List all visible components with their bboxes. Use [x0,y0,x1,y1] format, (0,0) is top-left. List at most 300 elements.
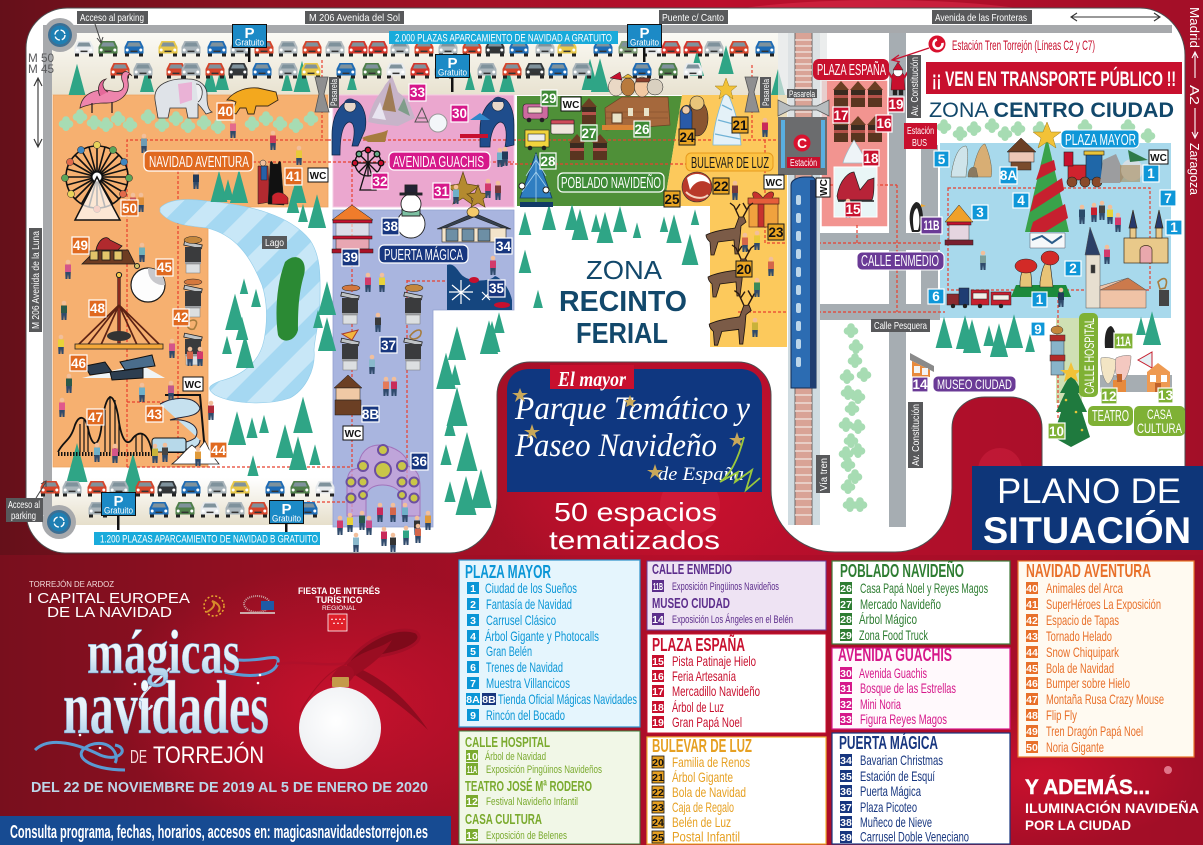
zone: Bulevar de Luz [664,95,787,347]
icon: Flip Fly ride [75,272,163,349]
icon: dragon train [82,238,135,264]
heading: Zona Centro Ciudad: ZONA CENTRO CIUDAD [929,99,1174,122]
red dashed walking routes [127,60,1150,520]
list: Plaza Mayor items: 4 [470,631,476,643]
list: Poblado Navideno items: 29 [840,630,852,642]
WC signs [183,97,1168,440]
icon and text: train station pointer [892,36,1095,62]
arrow: north south [34,78,42,147]
lake [160,199,320,403]
list: Teatro items: 12 [466,796,478,808]
icon: Belen de Luz [680,96,708,136]
list: Puerta Magica items: 38 [840,817,852,829]
icon: superheroes [258,160,288,205]
list: Navidad Aventura items: 42 [1026,615,1038,627]
banner: 2000 parking spaces: 2.000 PLAZAS APARCAMIENTO DE NAVIDAD A GRATUITO [395,32,612,44]
icon: snowman [397,185,425,238]
list: Plaza Mayor items: Muestra Villancicos [486,675,570,691]
zone markers: Avenida Guachis [372,84,468,199]
zone markers: Poblado Navideno: 27 [581,126,597,141]
list: Puerta Magica items: Muñeco de Nieve [860,814,932,830]
zone markers: lime Hospital Teatro Casa: 11A [1116,334,1131,349]
zone: Puerta Magica [333,210,514,527]
parking sign south 1 [102,492,136,530]
list: Plaza Mayor items: Gran Belén [486,643,532,659]
arrow to north parking [95,24,103,43]
banner: 2000 parking spaces [389,31,618,44]
text: 50 themed spaces [549,497,720,555]
list: Navidad Aventura items: Tren Dragón Papá Noel [1046,723,1143,739]
market stalls Poblado [569,98,608,160]
heading: Zona Recinto Ferial [559,255,687,350]
Plaza Espana market stalls [833,81,883,142]
icon: Rincon del Bocado booths [1050,326,1065,375]
zone markers: Navidad Aventura [70,103,302,458]
icon: flamingos [80,72,132,113]
roundabout south [42,505,76,539]
list: Museo Ciudad items: Exposición Los Ángeles en el Belén [672,613,793,626]
food booths Navidad Aventura [184,236,202,365]
sign: Teatro: TEATRO [1092,408,1129,425]
panel: largest theme park claim [507,365,762,492]
icon: penguin 11A [1105,326,1116,348]
icon: church and houses [1085,227,1146,308]
icon: Reyes Magos figure [368,76,415,126]
list: Poblado Navideno items: Zona Food Truck [859,627,929,643]
road labels M50 M45: M 45 [28,62,54,76]
list: Bulevar de Luz items: Bola de Navidad [672,784,746,800]
text: Y ademas city lighting: ILUMINACIÓN NAVIDEÑA [1025,799,1199,816]
list: Navidad Aventura items: 48 [1026,710,1038,722]
parked cars north rows [74,41,774,78]
sign: Navidad Aventura [144,151,253,171]
zone markers: Plaza Mayor: 3 [976,205,984,220]
WC signs: WC [819,179,830,196]
icon: classic carousel [945,205,973,245]
zone markers: Bulevar de Luz: 24 [679,130,695,145]
list: Plaza Mayor items: 7 [470,678,476,690]
parking sign north 1: P [244,25,255,42]
icon: capital emblem [204,596,224,616]
zone markers: Poblado Navideno: 26 [634,122,650,137]
sign: Avenida Guachis [389,152,490,171]
road sign: Acceso al parking: Acceso al parking [80,12,144,24]
icon: gift box [748,192,779,227]
list: Plaza Espana items: 16 [652,671,664,683]
panel: largest theme park claim: de España [658,464,744,485]
panel: legend Puerta Magica [832,732,1010,844]
sign: Museo Ciudad: MUSEO CIUDAD [937,376,1012,392]
list: Navidad Aventura items: 40 [1026,583,1038,595]
sign: Casa Cultura: CASA [1147,406,1172,422]
list: Navidad Aventura items [1026,580,1164,755]
list: Navidad Aventura items: 43 [1026,631,1038,643]
zone: Avenida Guachis [333,95,514,207]
list: Calle Hospital items: 11A [467,764,477,776]
icon: locomotive [1064,151,1104,187]
roundabout north [43,18,77,52]
list: Poblado Navideno items: Casa Papá Noel y Reyes Magos [860,580,988,596]
list: Plaza Mayor items: Trenes de Navidad [486,659,563,675]
panel: legend Avenida Guachis [832,645,1010,729]
list: Avenida Guachis items [840,665,956,727]
heading: Plaza Espana: PLAZA ESPAÑA [652,634,745,655]
sign: Plaza Espana: PLAZA ESPAÑA [817,59,886,79]
zone markers: Puerta Magica: 34 [496,239,511,254]
parking sign north 2: P [447,55,458,72]
sign: Calle Enmedio: CALLE ENMEDIO [861,253,939,270]
heading: Calle Enmedio: CALLE ENMEDIO [652,561,732,578]
food booths Plaza Picoteo [341,284,423,370]
icon: magic blue tree [519,153,553,207]
icon: white Christmas bauble with red bow [277,630,428,769]
parking sign south 2: P [281,501,292,518]
parking area south [52,478,333,525]
icon: penguin 11B [910,202,926,232]
list: Casa Cultura items: Exposición de Belenes [486,830,567,842]
zone markers: Navidad Aventura: 49 [73,238,88,253]
list: Puerta Magica items: Bavarian Christmas [860,752,943,768]
list: Plaza Espana items [652,653,760,730]
list: Puerta Magica items: 36 [840,786,852,798]
sign: Museo Ciudad [933,376,1016,392]
list: Plaza Espana items: Gran Papá Noel [672,714,742,730]
panel: largest theme park claim: Paseo Navideño [514,428,717,464]
list: Bulevar de Luz items: 25 [652,832,664,844]
heading: Poblado Navideno: POBLADO NAVIDEÑO [840,560,964,581]
roads [43,25,1172,527]
list: Bulevar de Luz items: 22 [652,787,664,799]
zone markers: Avenida Guachis: 31 [434,184,449,199]
text: Y ademas city lighting: Y ADEMÁS... [1025,776,1150,799]
compass: Madrid A2 Zaragoza: A2 [1187,85,1202,105]
parking sign south 1: Gratuito [104,506,133,516]
title block: Plano de Situacion [972,466,1203,551]
road sign: Pasarela left: Pasarela [329,79,339,106]
list: Plaza Espana items: Árbol de Luz [672,699,724,715]
zone markers: Bulevar de Luz [664,117,784,277]
food trucks [523,104,574,150]
railway track [778,33,827,525]
heading: Calle Hospital: CALLE HOSPITAL [465,734,550,751]
zone markers: lime Hospital Teatro Casa: 10 [1049,424,1064,439]
road sign: Av. Constitucion south [908,402,923,468]
zone markers: Plaza Mayor: 7 [1164,191,1172,206]
heading: Avenida Guachis: AVENIDA GUACHIS [838,645,952,665]
heading: Zona Recinto Ferial: FERIAL [576,318,668,350]
zone markers: Plaza Espana: 15 [845,202,861,217]
list: Bulevar de Luz items: 21 [652,772,664,784]
icon: castle [1124,210,1168,263]
road sign: Av. Constitucion south: Av. Constitución [910,404,922,466]
zone markers: Plaza Espana: 18 [863,151,879,166]
list: Puerta Magica items: 37 [840,802,852,814]
icon: train [791,177,816,388]
icon and text: train station pointer: Estación Tren Torrejón (Líneas C2 y C7) [952,37,1095,53]
icon: Museo Ciudad house [910,353,934,377]
zone markers: Bulevar de Luz: 21 [732,118,748,133]
panel: largest theme park claim: Parque Temático y [514,391,750,427]
list: Plaza Mayor items: Árbol Gigante y Photocalls [485,628,599,644]
heading: Teatro: TEATRO JOSÉ Mª RODERO [465,778,592,795]
zone markers: Plaza Mayor: 1 [1147,166,1155,181]
list: Plaza Mayor items: Fantasía de Navidad [486,596,572,612]
text: 50 themed spaces: tematizados [549,525,720,555]
heading: Plaza Mayor: PLAZA MAYOR [465,562,551,582]
road sign: Calle Pesquera: Calle Pesquera [874,320,927,332]
panel: legend Poblado Navideno [832,560,1010,644]
icon: Gran Belen [951,144,992,177]
parking sign north 2: Gratuito [438,68,467,78]
zone markers: Puerta Magica: 38 [383,219,398,234]
zone markers: Plaza Mayor: 4 [1017,193,1025,208]
footer: website banner: Consulta programa, fechas, horarios, accesos en: magicasnavidadestorrejon.es [10,822,428,842]
zone markers: Plaza Mayor: 9 [1034,322,1042,337]
list: Plaza Mayor items: 5 [470,646,476,658]
footer: website banner [0,816,451,845]
zone markers: Plaza Espana: 17 [833,108,849,123]
zone markers: Bulevar de Luz: 20 [736,262,752,277]
list: Bulevar de Luz items: Belén de Luz [672,814,731,830]
list: Puerta Magica items: 35 [840,771,852,783]
map base: white rounded plan outline [26,8,1185,553]
WC signs: WC [563,100,579,111]
sign: Puerta Magica [379,245,468,264]
list: Navidad Aventura items: 47 [1026,694,1038,706]
panel: legend Navidad Aventura [1018,561,1194,757]
list: Puerta Magica items: Carrusel Doble Veneciano [860,828,969,844]
logo: Magicas Navidades de Torrejon [35,619,278,770]
list: Plaza Mayor items: Tienda Oficial Mágicas Navidades [498,691,637,707]
list: Plaza Mayor items: 3 [470,615,476,627]
zone markers: Avenida Guachis: 33 [410,85,425,100]
zone markers: Plaza Mayor [928,151,1182,337]
zone: Plaza Mayor [940,143,1171,318]
heading: Bulevar de Luz: BULEVAR DE LUZ [652,736,752,756]
zone: Calle Hospital strip [1056,318,1172,403]
zone: Navidad Aventura [53,95,328,467]
list: Museo Ciudad items: 14 [652,614,664,626]
sign: Casa Cultura [1134,406,1185,436]
sign: Poblado Navideno [558,172,664,192]
train station [778,117,827,175]
list: Avenida Guachis items: 33 [840,714,852,726]
logo: Magicas Navidades de Torrejon: mágicas [87,619,240,687]
list: Bulevar de Luz items: Caja de Regalo [672,799,734,815]
sign: Calle Hospital: CALLE HOSPITAL [1081,318,1097,394]
WC signs: WC [185,380,201,391]
panel: largest theme park claim: El mayor [557,367,627,391]
icon: log cabin Casa Papa Noel [602,97,670,130]
road sign: Acceso al parking south: Acceso al [8,499,40,511]
list: Plaza Espana items: Feria Artesanía [672,668,736,684]
text: Y ademas city lighting: POR LA CIUDAD [1025,817,1131,833]
list: Plaza Mayor items: Rincón del Bocado [486,707,565,723]
list: Poblado Navideno items: 27 [840,599,852,611]
list: Plaza Espana items: 17 [652,686,664,698]
list: Navidad Aventura items: Animales del Arca [1046,580,1123,596]
list: Museo Ciudad items [652,613,793,626]
text: Y ademas city lighting [1025,776,1199,833]
zone markers: Poblado Navideno [540,90,650,169]
sign: Puerta Magica: PUERTA MÁGICA [384,245,463,264]
zone markers: Navidad Aventura: 43 [147,407,162,422]
road sign: Estacion BUS: BUS [912,137,927,149]
list: Poblado Navideno items: 26 [840,583,852,595]
icon: T-rex [227,88,278,114]
icon: rocks display [1100,150,1148,183]
icon: Christmas globe and swings [362,108,490,142]
pedestrian bridge over railway [778,100,829,116]
zone markers: purple Enmedio and Museo [912,217,942,392]
icon: mini Ferris wheel [352,147,384,190]
WC signs: WC [766,178,782,189]
zone markers: Navidad Aventura: 45 [157,260,172,275]
icon: Stars forest [447,172,489,207]
road sign: Acceso al parking south [6,498,43,522]
icon: Comunidad de Madrid flag [328,614,347,631]
parking sign north 3 [628,24,662,62]
list: Avenida Guachis items: 31 [840,683,852,695]
zone markers: Plaza Espana: 16 [876,116,892,131]
zone markers: Poblado Navideno: 29 [541,91,557,106]
icon: Christmas tree Calle Hospital [1053,362,1090,447]
zone markers: Puerta Magica [342,218,512,470]
text: Fiesta de Interes Turistico [298,586,380,612]
list: Poblado Navideno items: Mercado Navideño [860,596,941,612]
list: Bulevar de Luz items: Familia de Renos [672,754,750,770]
list: Avenida Guachis items: 32 [840,699,852,711]
list: Plaza Mayor items: 9 [470,710,476,722]
list: Poblado Navideno items [840,580,988,643]
icon: theatre masks [1101,355,1131,384]
zone markers: Plaza Mayor: 6 [932,289,940,304]
list: Navidad Aventura items: 49 [1026,726,1038,738]
road sign: Estacion BUS: Estación [907,125,934,137]
list: Calle Enmedio items: Exposición Pingüinos Navideños [672,581,779,593]
list: Plaza Espana items: 18 [652,702,664,714]
zone markers: Plaza Mayor: 2 [1069,261,1077,276]
compass: Madrid A2 Zaragoza: Zaragoza [1187,143,1202,196]
list: Plaza Mayor items: 2 [470,599,476,611]
icon: Christmas ball attraction [131,264,165,302]
text: 50 themed spaces: 50 espacios [554,497,717,527]
parking sign south 1: P [113,493,124,510]
zone markers: lime Hospital Teatro Casa [1048,333,1173,439]
list: Casa Cultura items [466,829,567,842]
parking sign south 2 [270,500,304,532]
list: Calle Hospital items: Árbol de Navidad [485,750,546,763]
zone markers: Navidad Aventura: 48 [90,301,105,316]
list: Plaza Espana items: Mercadillo Navideño [672,683,760,699]
icon: Guachis arch left [332,98,366,155]
road sign: Avenida de la Luna: M 206 Avenida de la Luna [30,231,42,329]
zone markers: Plaza Espana [833,97,904,217]
list: Navidad Aventura items: Flip Fly [1046,707,1077,723]
list: Navidad Aventura items: Snow Chiquipark [1046,644,1120,660]
zone markers: Navidad Aventura: 41 [286,169,301,184]
icon: snow mound Chiquipark [172,441,219,464]
road sign: Av. Constitucion north: Av. Constitución [909,57,921,116]
parked cars south rows [40,481,334,518]
road sign: Pasarela right: Pasarela [761,79,771,106]
list: Plaza Espana items: 19 [652,717,664,729]
icon: Tornado Helado slide [152,395,205,452]
lake island [276,257,305,341]
WC signs: WC [310,171,326,182]
banner: 1200 parking spaces [94,532,320,546]
zone: Poblado Navideno [517,96,682,206]
sign: Avenida Guachis: AVENIDA GUACHIS [393,154,484,171]
icon: Bumper on ice [82,355,165,380]
arrow: east west [1071,13,1160,21]
logo: Magicas Navidades de Torrejon: DE [130,747,147,767]
list: Navidad Aventura items: Bumper sobre Hielo [1046,675,1130,691]
icon: theatre building [1113,374,1126,392]
sign: Casa Cultura: CULTURA [1137,420,1182,436]
list: Avenida Guachis items: Bosque de las Estrellas [860,680,956,696]
list: Bulevar de Luz items: 23 [652,802,664,814]
icon: Casa Cultura and book [1138,352,1170,392]
icon: Santa Claus [887,62,909,95]
road sign: Estacion BUS [904,123,937,149]
sign: Navidad Aventura: NAVIDAD AVENTURA [149,154,249,171]
zone markers: purple Enmedio and Museo: 14 [912,377,928,392]
list: Plaza Mayor items [466,580,637,723]
zone markers: Navidad Aventura: 47 [88,410,103,425]
icon: Puerta Magica light arch [346,445,420,516]
zone markers: Navidad Aventura: 50 [122,201,137,216]
panel: legend Calle Enmedio and Museo Ciudad [647,561,826,630]
icon: Bavarian hut [437,207,511,242]
zone markers: lime Hospital Teatro Casa: 12 [1101,389,1117,404]
icon: snack booth Plaza Mayor [1158,279,1169,306]
list: Teatro items: Festival Navideño Infantil [486,796,578,808]
parking sign south 2: Gratuito [272,514,301,524]
icon: pink walkway bridge left [315,77,329,112]
logo: Magicas Navidades de Torrejon: TORREJÓN [153,742,264,769]
zone markers: Puerta Magica: 37 [381,338,396,353]
list: Navidad Aventura items: Tornado Helado [1046,628,1112,644]
list: Calle Hospital items [466,750,602,776]
banner: public transport [926,62,1182,94]
list: Plaza Mayor items: Ciudad de los Sueños [485,580,577,596]
WC signs: WC [345,429,361,440]
list: Bulevar de Luz items: 24 [652,817,664,829]
zone markers: Plaza Mayor: 5 [938,152,946,167]
logo: Magicas Navidades de Torrejon: navidades [63,666,269,750]
list: Teatro items [466,795,578,808]
road labels M50 M45: M 50 [28,51,54,65]
zone markers: Bulevar de Luz: 22 [713,179,729,194]
list: Navidad Aventura items: 45 [1026,663,1038,675]
title block: Plano de Situacion: SITUACIÓN [983,509,1191,551]
zone markers: Puerta Magica: 39 [343,250,358,265]
zone markers: Avenida Guachis: 30 [452,106,467,121]
zone markers: Puerta Magica: 8B [362,407,379,422]
shrubs [59,109,1155,512]
list: Avenida Guachis items: 30 [840,668,852,680]
zone markers: Poblado Navideno: 28 [540,154,556,169]
sign: Plaza Mayor: PLAZA MAYOR [1065,132,1136,149]
list: Plaza Espana items: Pista Patinaje Hielo [672,653,756,669]
zone markers: Navidad Aventura: 40 [218,104,233,119]
list: Navidad Aventura items: 46 [1026,678,1038,690]
icon: reindeer family [706,203,759,345]
panel: legend Bulevar de Luz [647,736,826,844]
list: Poblado Navideno items: Árbol Mágico [859,611,917,627]
panel: legend Plaza Mayor [459,560,640,727]
